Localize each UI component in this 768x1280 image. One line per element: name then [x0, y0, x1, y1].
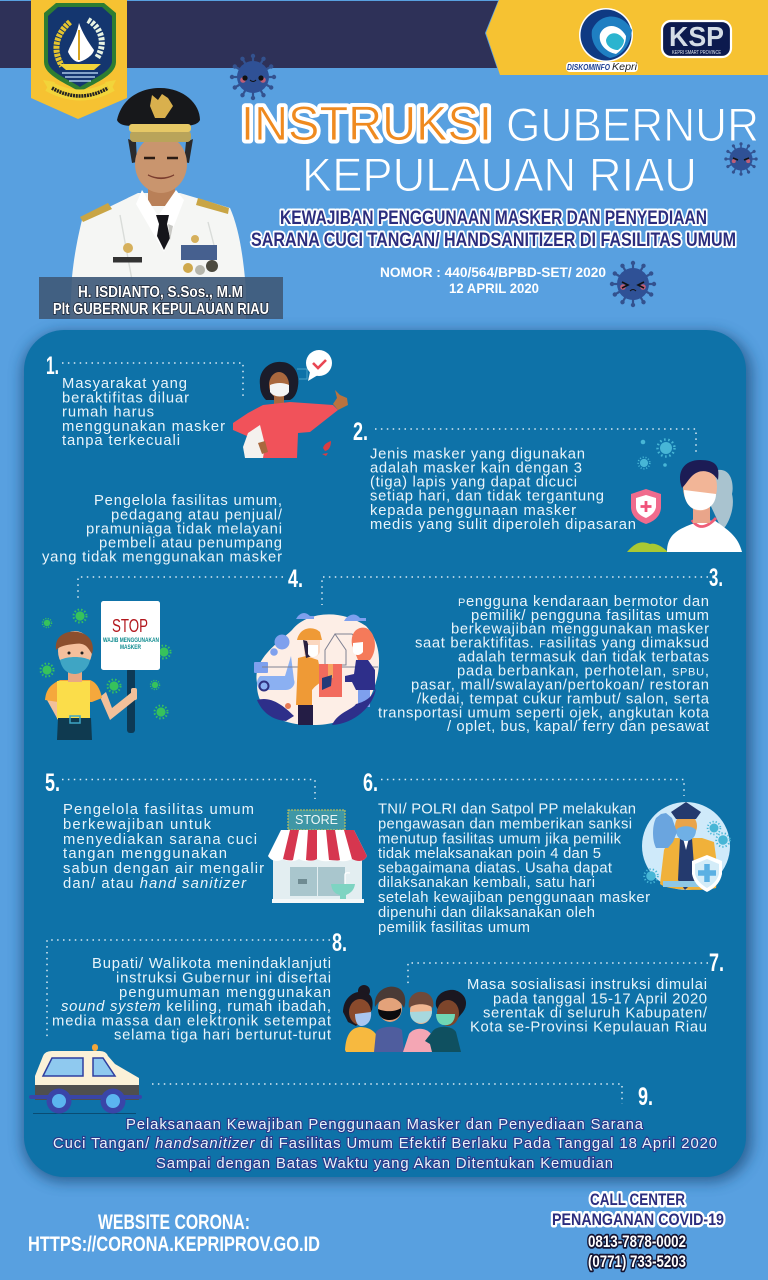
- item 2: adalah masker kain dengan 3: [370, 460, 582, 476]
- item 6: dipenuhi dan dilaksanakan oleh: [378, 905, 595, 921]
- virus illustration right: [724, 142, 758, 176]
- item 4: [40, 493, 379, 740]
- call center block: (0771) 733-5203: [588, 1252, 686, 1271]
- item 3: /kedai, tempat cukur rambut/ salon, serta: [417, 691, 710, 707]
- item 4: pembeli atau penumpang: [99, 536, 282, 552]
- item 3: pemilik/ pengguna fasilitas umum: [471, 608, 709, 624]
- icon: man with mask and shield: [627, 440, 742, 552]
- title: GUBERNUR: [506, 98, 759, 151]
- item 5: berkewajiban untuk: [63, 817, 212, 833]
- item 9: Cuci Tangan/ handsanitizer di Fasilitas Umum Efektif Berlaku Pada Tanggal 18 April 2020: [53, 1136, 717, 1152]
- item 3: Pengguna kendaraan bermotor dan: [458, 594, 709, 610]
- item 8: instruksi Gubernur ini disertai: [116, 970, 331, 986]
- decree number and date: 12 APRIL 2020: [449, 280, 539, 296]
- item 8: Bupati/ Walikota menindaklanjuti: [92, 956, 331, 972]
- item 2: medis yang sulit diperoleh dipasaran: [370, 517, 636, 533]
- item 1: [46, 350, 348, 458]
- item 5: menyediakan sarana cuci: [63, 832, 257, 848]
- title: INSTRUKSI: [241, 98, 492, 151]
- item 7: 7.: [709, 949, 724, 977]
- item 2: [353, 418, 742, 552]
- title: KEPULAUAN RIAU: [302, 148, 697, 201]
- title: INSTRUKSI: [241, 98, 492, 151]
- item 3: / oplet, bus, kapal/ ferry dan pesawat: [447, 719, 709, 735]
- main panel: [24, 330, 746, 1177]
- item 5: tangan menggunakan: [63, 846, 227, 862]
- icon: four people wearing masks: [343, 985, 466, 1052]
- item 6: tidak melaksanakan poin 4 dan 5: [378, 846, 601, 862]
- icon: person holding stop sign: STOP: [112, 616, 148, 636]
- title: [241, 98, 759, 201]
- item 1: Masyarakat yang: [62, 376, 187, 392]
- item 7: serentak di seluruh Kabupaten/: [483, 1006, 708, 1022]
- item 3: berkewajiban menggunakan masker: [451, 621, 709, 637]
- item 6: sebagaimana diatas. Usaha dapat: [378, 861, 612, 877]
- item 6: dilaksanakan kembali, satu hari: [378, 875, 595, 891]
- virus illustration angry: [610, 261, 656, 307]
- website block: HTTPS://CORONA.KEPRIPROV.GO.ID: [28, 1233, 320, 1256]
- item 4: pedagang atau penjual/: [111, 507, 283, 523]
- item 3: saat beraktifitas. Fasilitas yang dimaksud: [415, 636, 709, 652]
- name plate: H. ISDIANTO, S.Sos., M.M: [78, 284, 243, 301]
- icon: store with sink: [268, 810, 367, 903]
- call center block: CALL CENTER: [590, 1190, 685, 1209]
- item 5: 5.: [45, 769, 60, 797]
- item 6: setelah kewajiban penggunaan masker: [378, 890, 650, 906]
- name plate: [39, 277, 283, 319]
- logo: KSP: KSP: [669, 21, 724, 52]
- logo: Diskominfo: DISKOMINFO: [567, 63, 611, 72]
- logo: Diskominfo: Kepri: [612, 62, 638, 73]
- portrait of the governor: [70, 88, 246, 319]
- logo: Diskominfo: [566, 8, 638, 73]
- icon: officer with raised hand and shield: [642, 802, 730, 892]
- item 8: sound system keliling, rumah ibadah,: [61, 999, 331, 1015]
- item 5: sabun dengan air mengalir: [63, 861, 264, 877]
- icon: woman with mask: [233, 350, 348, 458]
- item 5: Pengelola fasilitas umum: [63, 802, 254, 818]
- item 6: [363, 769, 730, 936]
- item 4: yang tidak menggunakan masker: [42, 550, 282, 566]
- item 2: 2.: [353, 418, 368, 446]
- item 5: dan/ atau hand sanitizer: [63, 876, 247, 892]
- item 5: [45, 769, 367, 903]
- item 9: Sampai dengan Batas Waktu yang Akan Ditentukan Kemudian: [156, 1156, 613, 1172]
- item 1: 1.: [46, 352, 59, 380]
- decree number and date: [380, 264, 606, 296]
- item 9: 9.: [638, 1083, 653, 1111]
- panel shadow: [22, 332, 752, 1182]
- virus illustration top: [230, 54, 276, 100]
- item 3: 3.: [709, 564, 723, 592]
- item 3: transportasi umum seperti ojek, angkutan kota: [378, 705, 710, 721]
- item 8: media massa dan elektronik setempat: [52, 1014, 331, 1030]
- decree number and date: NOMOR : 440/564/BPBD-SET/ 2020: [380, 264, 606, 280]
- item 3: pasar, mall/swalayan/pertokoan/ restoran: [411, 677, 709, 693]
- item 4: Pengelola fasilitas umum,: [94, 493, 282, 509]
- item 4: pramuniaga tidak melayani: [86, 521, 282, 537]
- item 1: beraktifitas diluar: [62, 390, 189, 406]
- item 9: Pelaksanaan Kewajiban Penggunaan Masker dan Penyediaan Sarana: [126, 1117, 644, 1133]
- item 6: pengawasan dan memberikan sanksi: [378, 816, 632, 832]
- item 8: [47, 929, 347, 1044]
- item 7: Kota se-Provinsi Kepulauan Riau: [470, 1020, 707, 1036]
- item 6: 6.: [363, 769, 378, 797]
- item 1: rumah harus: [62, 405, 154, 421]
- icon: person holding stop sign: WAJIB MENGGUNAKAN: [103, 638, 159, 644]
- item 7: Masa sosialisasi instruksi dimulai: [467, 977, 707, 993]
- logo: KSP: KEPRI SMART PROVINCE: [672, 50, 722, 56]
- item 6: menutup fasilitas umum jika pemilik: [378, 831, 622, 847]
- call center block: PENANGANAN COVID-19: [552, 1210, 724, 1229]
- item 7: pada tanggal 15-17 April 2020: [493, 992, 707, 1008]
- subtitle: [251, 207, 736, 251]
- call center block: 0813-7878-0002: [588, 1232, 686, 1251]
- icon: van with loudspeaker: [29, 1044, 142, 1114]
- item 3: pada berbankan, perhotelan, SPBU,: [457, 663, 709, 679]
- item 4: 4.: [288, 565, 303, 593]
- item 2: setiap hari, dan tidak tergantung: [370, 489, 604, 505]
- item 2: kepada penggunaan masker: [370, 503, 576, 519]
- item 2: (tiga) lapis yang dapat dicuci: [370, 475, 577, 491]
- icon: store with sink: STORE: [295, 813, 338, 827]
- item 7: [343, 949, 724, 1052]
- name plate: Plt GUBERNUR KEPULAUAN RIAU: [53, 301, 269, 318]
- icon: delivery courier: [254, 613, 379, 725]
- item 2: Jenis masker yang digunakan: [370, 446, 585, 462]
- item 8: 8.: [332, 929, 347, 957]
- item 1: tanpa terkecuali: [62, 433, 180, 449]
- item 1: menggunakan masker: [62, 419, 225, 435]
- header bar: [0, 0, 768, 75]
- item 6: pemilik fasilitas umum: [378, 920, 530, 936]
- website block: [28, 1211, 320, 1256]
- item 8: pengumuman menggunakan: [119, 985, 331, 1001]
- website block: WEBSITE CORONA:: [98, 1211, 250, 1234]
- item 8: selama tiga hari berturut-turut: [114, 1028, 331, 1044]
- item 6: TNI/ POLRI dan Satpol PP melakukan: [378, 802, 636, 818]
- icon: person holding stop sign: [40, 601, 170, 740]
- call center block: [552, 1190, 724, 1271]
- item 9: [53, 1083, 717, 1172]
- icon: person holding stop sign: MASKER: [120, 645, 142, 651]
- item 3: adalah termasuk dan tidak terbatas: [458, 650, 709, 666]
- logo pennant with provincial emblem: [31, 0, 127, 119]
- item 3: [322, 564, 723, 735]
